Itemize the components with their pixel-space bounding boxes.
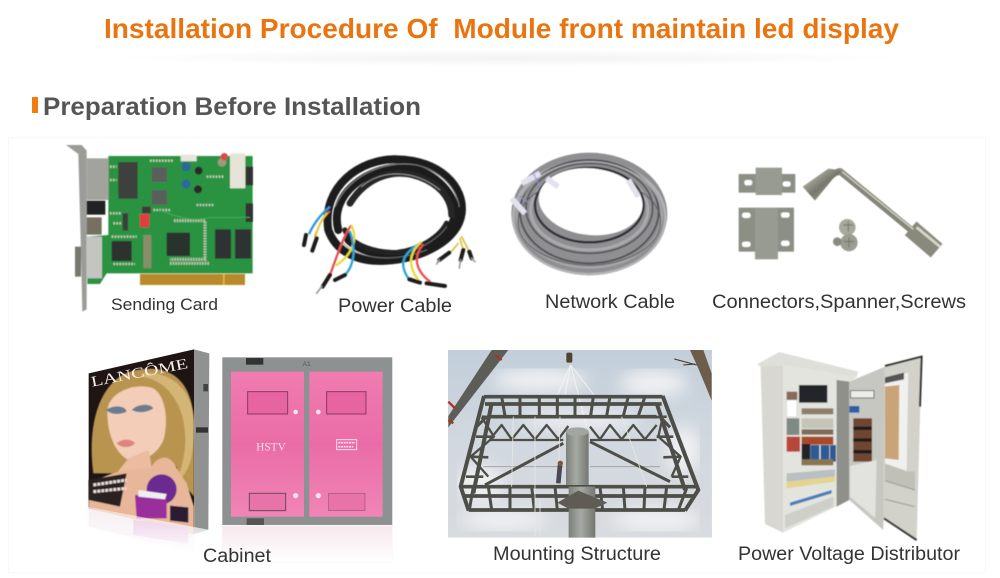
icon: small bracket xyxy=(739,168,795,195)
hook and slings xyxy=(566,353,572,363)
item: sending card xyxy=(66,145,253,314)
icon: large bracket xyxy=(739,208,794,259)
sky edge mask xyxy=(440,340,773,560)
image: LED cabinet front with poster xyxy=(87,349,392,562)
image: electrical distribution cabinet xyxy=(757,352,922,541)
reflection under cabinet xyxy=(222,526,392,562)
panel: preparation items xyxy=(66,144,966,564)
tree xyxy=(690,350,712,401)
label: cabinet: Cabinet xyxy=(203,546,272,567)
image: sending card board xyxy=(66,145,253,312)
item: cabinet xyxy=(87,349,392,567)
image: network cable coil xyxy=(511,153,667,275)
steel frame xyxy=(461,396,698,511)
item: mounting structure xyxy=(448,350,712,564)
section heading: Preparation Before Installation xyxy=(43,93,421,121)
crane arm xyxy=(448,350,508,427)
image: steel structure being hoisted xyxy=(448,350,712,538)
label: connectors, spanner, screws: Connectors,Spanner,Screws xyxy=(712,292,966,313)
image: LED cabinet front with poster: HSTV xyxy=(256,441,287,453)
image: LED cabinet front with poster: LANCÔME xyxy=(90,355,189,391)
icon: screws xyxy=(833,219,858,251)
item: connectors, spanner, screws xyxy=(712,168,966,313)
image: power cable coil xyxy=(304,159,475,293)
label: network cable: Network Cable xyxy=(545,292,675,313)
label: sending card: Sending Card xyxy=(111,295,218,314)
label: mounting structure: Mounting Structure xyxy=(493,544,661,565)
reflection under poster xyxy=(89,508,194,553)
label: power cable: Power Cable xyxy=(338,296,452,317)
worker xyxy=(558,465,560,483)
icon: spanner xyxy=(803,169,940,251)
label: power voltage distributor: Power Voltage Distributor xyxy=(738,544,961,565)
item: power voltage distributor xyxy=(738,352,961,565)
title: Installation Procedure Of Module front maintain led display xyxy=(104,13,899,44)
image: LED cabinet front with poster: A1 xyxy=(303,361,311,368)
pole xyxy=(566,432,589,485)
image: connectors, spanner and screws xyxy=(739,168,940,259)
item: network cable xyxy=(511,153,675,313)
item: power cable xyxy=(304,159,475,317)
